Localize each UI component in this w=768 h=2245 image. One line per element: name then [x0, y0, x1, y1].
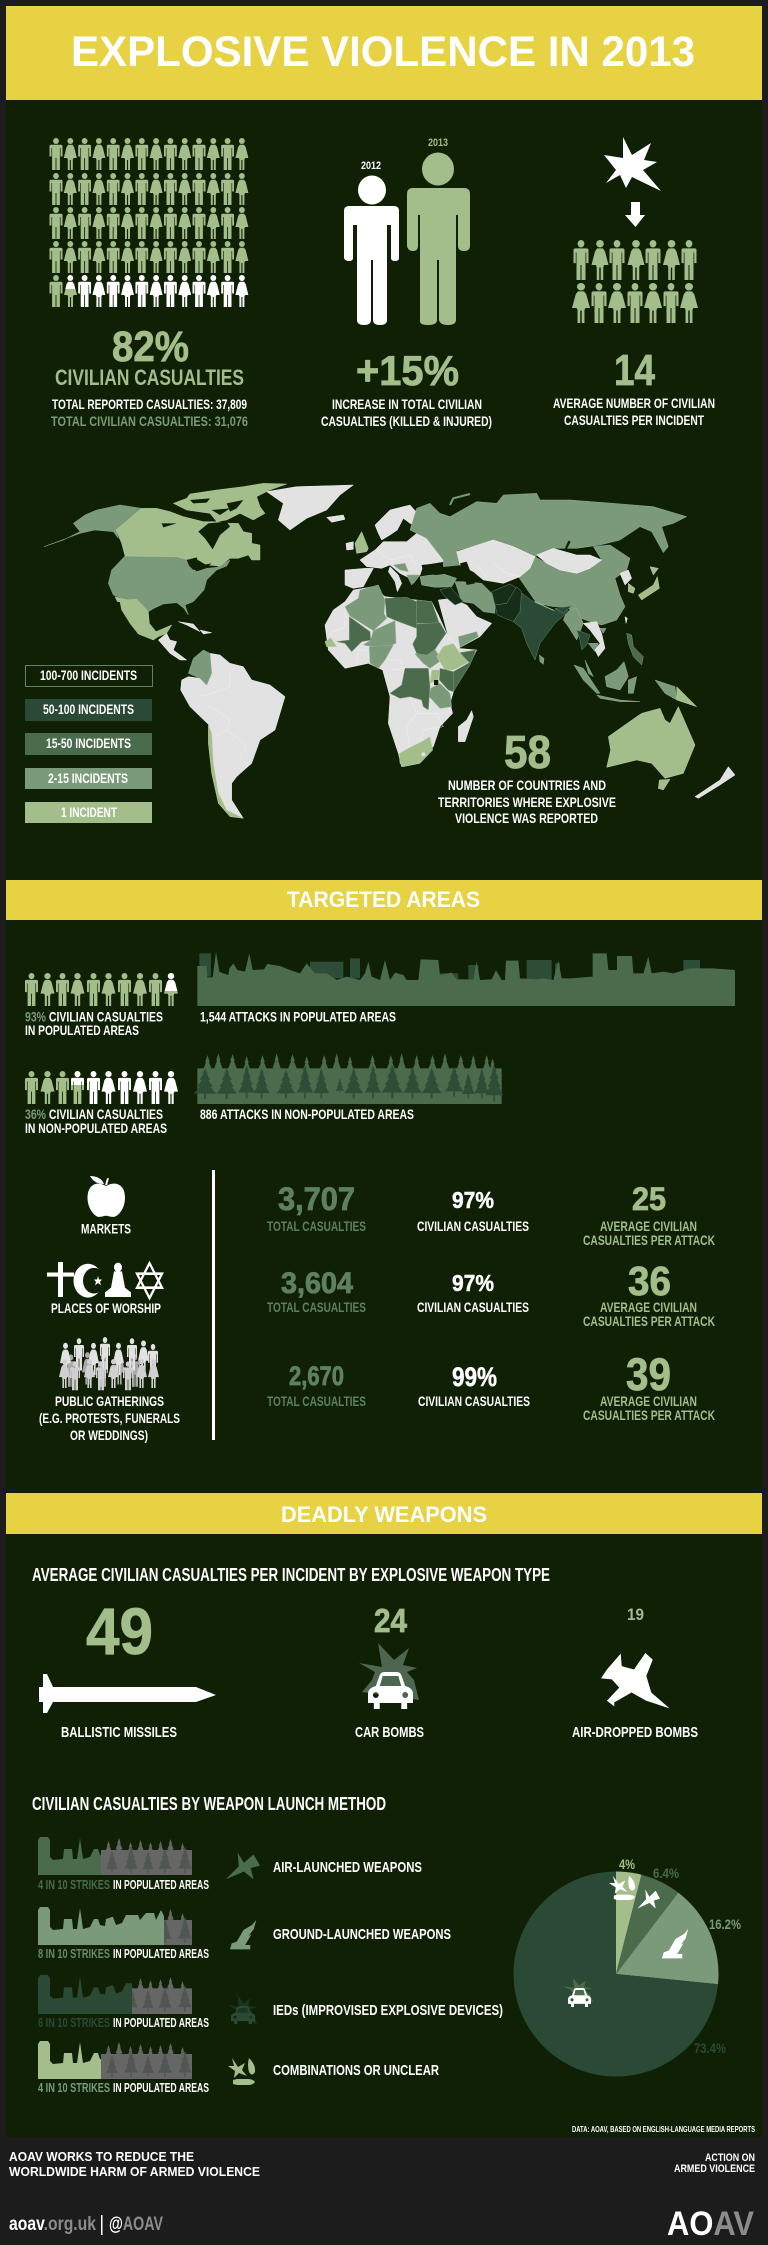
caption — [38, 2080, 209, 2095]
icon: explosion — [604, 137, 661, 191]
label: places of worship: PLACES OF WORSHIP — [51, 1300, 161, 1316]
panel: casualties per incident — [553, 137, 715, 428]
icon — [230, 1920, 256, 1949]
stat: 58 countries — [438, 726, 616, 826]
legend item: 50-100: 50-100 INCIDENTS — [43, 701, 134, 717]
caption: 6 IN 10 STRIKES — [38, 2015, 110, 2030]
legend item: 15-50: 15-50 INCIDENTS — [46, 735, 131, 751]
title banner — [6, 6, 762, 100]
label: 6.4%: 6.4% — [653, 1865, 679, 1881]
legend — [25, 666, 152, 823]
label: 73.4%: 73.4% — [694, 2040, 726, 2056]
legend item: 1 — [25, 802, 152, 823]
row: markets stats: 97% — [452, 1187, 494, 1213]
row: markets stats: TOTAL CASUALTIES — [267, 1218, 366, 1234]
icon: combo — [609, 1876, 635, 1900]
row: markets stats: 3,707 — [278, 1181, 355, 1217]
label: car bombs: CAR BOMBS — [355, 1724, 424, 1741]
map: Europe, Africa, Middle East — [325, 505, 492, 767]
caption: IN POPULATED AREAS — [113, 1946, 209, 1961]
slice: air 6.4% — [616, 1875, 678, 1974]
label: IEDs (IMPROVISED EXPLOSIVE DEVICES) — [273, 2002, 503, 2019]
map: Asia and Oceania — [410, 493, 735, 798]
legend item: 15-50 — [25, 733, 152, 755]
text: 36% civilian — [25, 1106, 167, 1136]
legend item: 1: 1 INCIDENT — [61, 804, 117, 820]
chart: city skyline attacks — [197, 952, 735, 1006]
stat: 58 countries: 58 — [504, 726, 551, 778]
text: description: CASUALTIES PER INCIDENT — [564, 412, 704, 428]
map: Americas — [44, 483, 353, 818]
footer org name — [674, 2152, 755, 2175]
icon — [228, 2058, 255, 2085]
icon: car bomb — [359, 1643, 419, 1709]
row: gatherings stats: CASUALTIES PER ATTACK — [583, 1407, 715, 1423]
footer mission: AOAV WORKS TO REDUCE THE — [9, 2150, 194, 2164]
icon: buddha — [105, 1263, 131, 1297]
text: 1,544 attacks: 1,544 ATTACKS IN POPULATED AREAS — [200, 1008, 396, 1024]
title banner: EXPLOSIVE VIOLENCE IN 2013 — [71, 28, 695, 76]
text: total civilian: TOTAL CIVILIAN CASUALTIES: 31,076 — [51, 413, 248, 429]
heading: deadly weapons — [6, 1493, 762, 1534]
icon: crowd — [59, 1337, 159, 1390]
row: worship stats — [267, 1258, 715, 1329]
subheading: launch method: CIVILIAN CASUALTIES BY WEAPON LAUNCH METHOD — [32, 1794, 386, 1814]
legend item: 100-700: 100-700 INCIDENTS — [40, 667, 137, 683]
stat: 19: 19 — [627, 1605, 644, 1624]
panel: year on year increase — [321, 137, 492, 429]
text: description — [553, 395, 715, 428]
icon: launcher — [662, 1929, 688, 1958]
slice: IEDs 73.4% — [514, 1872, 718, 2077]
legend item: 50-100 — [25, 699, 152, 721]
text: 93% civilian: IN POPULATED AREAS — [25, 1022, 139, 1038]
icon — [228, 1995, 257, 2024]
footer mission: WORLDWIDE HARM OF ARMED VIOLENCE — [9, 2165, 260, 2179]
row: gatherings stats: CIVILIAN CASUALTIES — [418, 1393, 530, 1409]
world map — [44, 483, 735, 818]
row: markets stats — [267, 1181, 715, 1248]
icon: star of david — [137, 1263, 162, 1298]
label: 2012: 2012 — [361, 160, 381, 172]
stat: 58 countries: NUMBER OF COUNTRIES AND — [448, 777, 606, 793]
row: worship stats: CASUALTIES PER ATTACK — [583, 1313, 715, 1329]
icon — [226, 1853, 260, 1879]
row: worship stats: 97% — [452, 1270, 494, 1296]
row: gatherings stats: 39 — [626, 1349, 671, 1400]
row: gatherings stats: 99% — [452, 1362, 497, 1392]
row: markets stats: CASUALTIES PER ATTACK — [583, 1232, 715, 1248]
text: total reported: TOTAL REPORTED CASUALTIES: 37,809 — [52, 396, 247, 412]
slice: ground 16.2% — [616, 1893, 719, 1984]
row: markets stats: CIVILIAN CASUALTIES — [417, 1218, 529, 1234]
text: 36% civilian: IN NON-POPULATED AREAS — [25, 1120, 167, 1136]
footer logo: AOAV — [667, 2205, 754, 2243]
stat: 58 countries: TERRITORIES WHERE EXPLOSIVE — [438, 794, 616, 810]
stat: 49: 49 — [86, 1594, 153, 1668]
row: combinations — [38, 2041, 439, 2095]
icon: cross — [47, 1262, 74, 1297]
icon: plane — [601, 1653, 670, 1708]
row: gatherings stats: AVERAGE CIVILIAN — [600, 1393, 697, 1409]
icon: missile — [39, 1674, 216, 1713]
caption: IN POPULATED AREAS — [113, 2080, 209, 2095]
legend item: 2-15 — [25, 768, 152, 789]
stat: 82%: 82% — [112, 323, 189, 371]
arrow: down — [625, 202, 645, 227]
stat: 24: 24 — [374, 1602, 408, 1639]
label: public gatherings: OR WEDDINGS) — [70, 1427, 148, 1443]
row: markets stats: 25 — [632, 1181, 666, 1217]
label: 2013: 2013 — [428, 137, 448, 149]
panel: civilian casualties share — [49, 138, 248, 429]
row: air-launched — [38, 1837, 422, 1892]
label: ballistic missiles: BALLISTIC MISSILES — [61, 1724, 177, 1741]
non-populated areas people — [25, 1071, 178, 1104]
text: 36% civilian: 36% CIVILIAN CASUALTIES — [25, 1106, 163, 1122]
label: markets: MARKETS — [81, 1220, 131, 1236]
caption — [38, 1946, 209, 1961]
row: worship stats: AVERAGE CIVILIAN — [600, 1299, 697, 1315]
slice: combinations 4% — [616, 1871, 642, 1974]
caption: 4 IN 10 STRIKES — [38, 2080, 110, 2095]
row: gatherings stats: 2,670 — [289, 1361, 344, 1391]
caption: 8 IN 10 STRIKES — [38, 1946, 110, 1961]
label: public gatherings: (E.G. PROTESTS, FUNERALS — [39, 1410, 180, 1426]
label: AIR-LAUNCHED WEAPONS — [273, 1859, 422, 1876]
label: 16.2%: 16.2% — [709, 1916, 741, 1932]
row: worship stats: 3,604 — [281, 1267, 353, 1300]
text: increase description: INCREASE IN TOTAL CIVILIAN — [332, 396, 482, 412]
pie chart — [514, 1856, 741, 2077]
icon: fourteen people — [572, 240, 698, 323]
stat: +15%: +15% — [356, 347, 459, 394]
footer links: @AOAV — [109, 2214, 163, 2235]
text: 93% civilian: 93% CIVILIAN CASUALTIES — [25, 1008, 163, 1024]
legend item: 2-15: 2-15 INCIDENTS — [48, 770, 128, 786]
stat: 58 countries: VIOLENCE WAS REPORTED — [455, 810, 598, 826]
caption: IN POPULATED AREAS — [113, 2015, 209, 2030]
caption: IN POPULATED AREAS — [113, 1877, 209, 1892]
label: public gatherings: PUBLIC GATHERINGS — [55, 1393, 164, 1409]
label: public gatherings — [39, 1393, 180, 1443]
footer org name: ACTION ON — [705, 2152, 755, 2164]
text: increase description — [321, 396, 492, 429]
row: IEDs — [38, 1975, 503, 2030]
icon: apple — [88, 1176, 125, 1217]
populated areas people — [25, 973, 178, 1006]
row: markets stats: AVERAGE CIVILIAN — [600, 1218, 697, 1234]
icon: grid of people — [49, 138, 248, 308]
label: air-dropped bombs: AIR-DROPPED BOMBS — [572, 1724, 698, 1741]
chart: forest attacks — [194, 1053, 503, 1104]
heading: targeted areas — [6, 880, 762, 920]
footer links: aoav.org.uk — [9, 2214, 96, 2235]
strike strip — [38, 1975, 192, 2014]
row: gatherings stats — [267, 1349, 715, 1423]
row: ground-launched — [38, 1907, 451, 1961]
icon: 2012 person — [344, 176, 399, 325]
strike strip — [38, 1907, 192, 1945]
caption — [38, 1877, 209, 1892]
subheading: weapon type: AVERAGE CIVILIAN CASUALTIES PER INCIDENT BY EXPLOSIVE WEAPON TYPE — [32, 1565, 550, 1585]
label: 4%: 4% — [619, 1856, 635, 1872]
icon: plane — [637, 1889, 660, 1909]
icon: crescent and star — [74, 1264, 105, 1298]
strike strip — [38, 2041, 192, 2079]
label: civilian casualties: CIVILIAN CASUALTIES — [55, 365, 244, 390]
label: GROUND-LAUNCHED WEAPONS — [273, 1926, 451, 1943]
caption: 4 IN 10 STRIKES — [38, 1877, 110, 1892]
text: 886 attacks: 886 ATTACKS IN NON-POPULATED AREAS — [200, 1106, 414, 1122]
row: worship stats: 36 — [628, 1258, 671, 1304]
strike strip — [38, 1837, 192, 1875]
legend item: 100-700 — [26, 666, 152, 686]
row: gatherings stats: TOTAL CASUALTIES — [267, 1393, 366, 1409]
footer links — [9, 2214, 163, 2235]
heading: deadly weapons: DEADLY WEAPONS — [281, 1502, 487, 1527]
caption — [38, 2015, 209, 2030]
text: increase description: CASUALTIES (KILLED & INJURED) — [321, 413, 492, 429]
icon: car — [563, 1978, 593, 2007]
divider — [212, 1170, 215, 1440]
row: worship stats: CIVILIAN CASUALTIES — [417, 1299, 529, 1315]
stat: 14: 14 — [614, 346, 655, 395]
text: 93% civilian — [25, 1008, 163, 1038]
heading: targeted areas: TARGETED AREAS — [287, 887, 480, 912]
footer mission — [9, 2150, 260, 2179]
label: COMBINATIONS OR UNCLEAR — [273, 2062, 439, 2079]
icon: 2013 person — [407, 152, 470, 325]
row: worship stats: TOTAL CASUALTIES — [267, 1299, 366, 1315]
text: description: AVERAGE NUMBER OF CIVILIAN — [553, 395, 715, 411]
